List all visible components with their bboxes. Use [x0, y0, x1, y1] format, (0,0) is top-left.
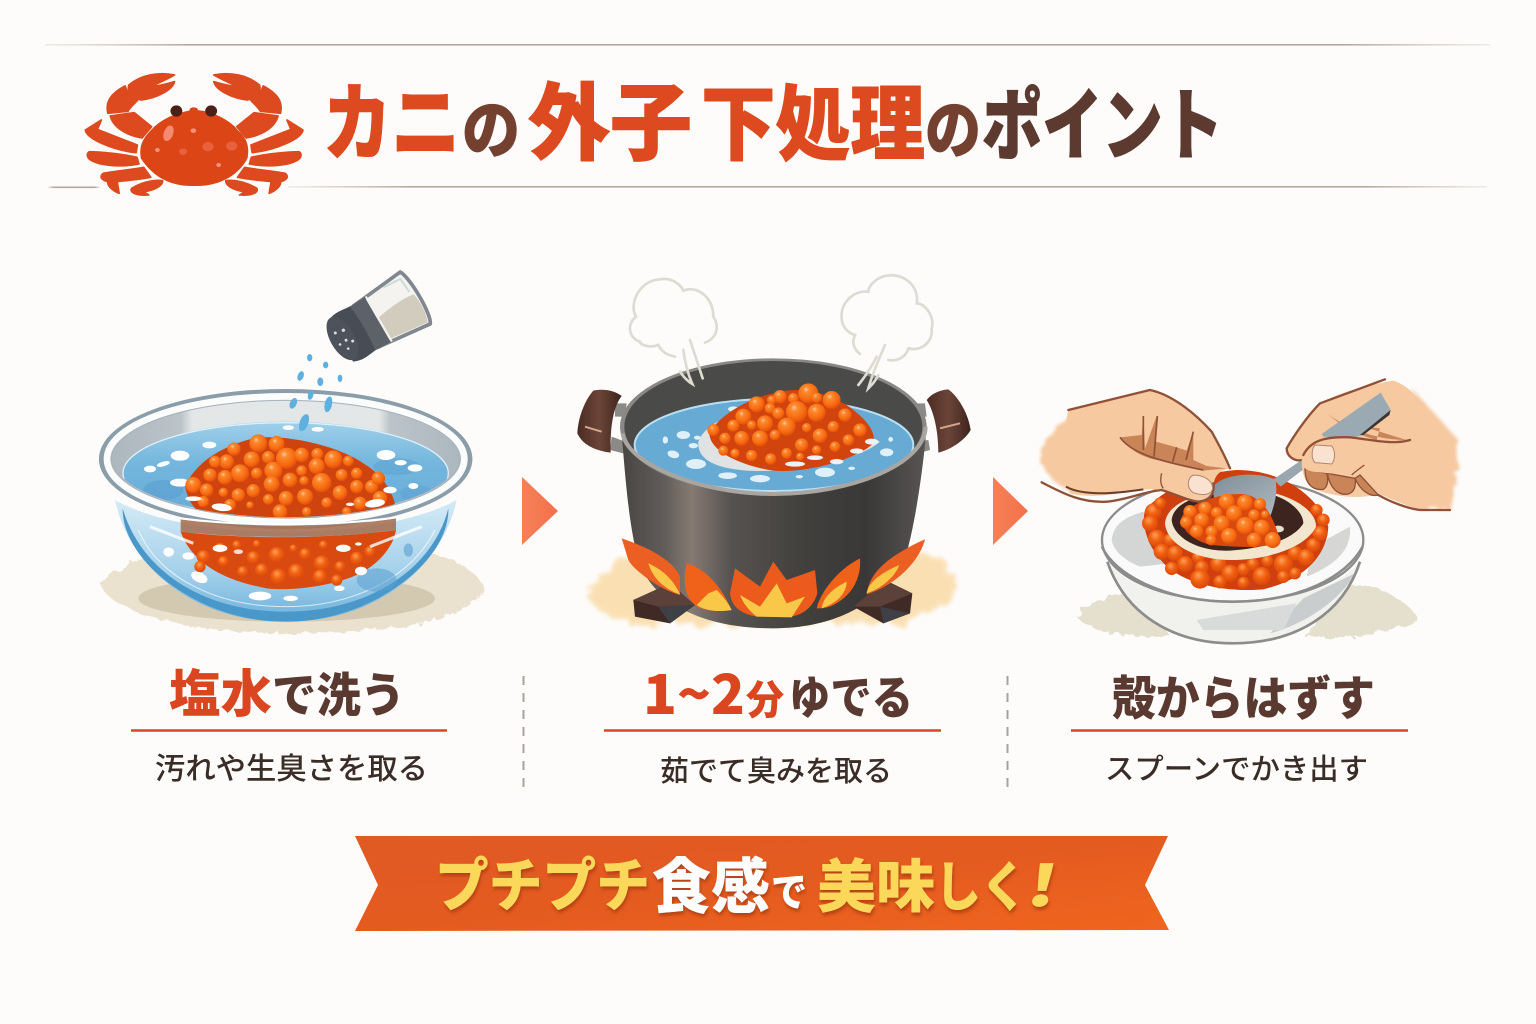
step 3 underline: [1071, 729, 1408, 732]
illustration: hands scooping roe from shell: [1040, 379, 1459, 643]
bottom header rule: [48, 186, 1487, 188]
crab shell with roe: [1142, 470, 1330, 590]
step 2 heading: 分: [746, 668, 784, 726]
illustration: salted water bowl with roe: [99, 270, 483, 633]
banner text: 美味: [817, 840, 935, 924]
step 2 heading: ゆでる: [789, 662, 913, 728]
step 3 caption: スプーンでかき出す: [1105, 746, 1368, 788]
pot handles: [577, 389, 971, 453]
banner text: !: [1021, 842, 1065, 923]
bowl glass body: [115, 500, 457, 622]
divider 1: [522, 676, 524, 790]
burner stands: [633, 580, 912, 623]
serving bowl front: [1102, 547, 1363, 643]
salt droplets: [288, 354, 342, 433]
pot body: [622, 427, 927, 628]
icon: crab: [85, 74, 303, 195]
banner text: しく: [935, 843, 1027, 922]
roe pile through the glass: [150, 527, 422, 601]
pot interior and water: [620, 358, 927, 495]
title: カニ: [323, 57, 460, 178]
roe in pot: [707, 383, 878, 471]
steam clouds: [630, 275, 932, 388]
step 2 caption: 茹でて臭みを取る: [660, 748, 892, 790]
title: 下処理: [701, 58, 925, 177]
spoon handle: [1322, 393, 1391, 438]
title: 外子: [528, 57, 692, 178]
bowl back and water: [99, 400, 472, 508]
step 3 heading: 殻からはずす: [1112, 660, 1375, 729]
step 1 heading: [169, 653, 405, 727]
title: [323, 57, 1223, 178]
step 2 underline: [604, 729, 941, 732]
banner text: 食感: [652, 839, 770, 926]
top header rule: [45, 44, 1490, 46]
step 1 caption: 汚れや生臭さを取る: [155, 744, 428, 788]
salt shaker: [318, 270, 434, 372]
step 1 heading: 塩水: [169, 653, 272, 727]
step 2 heading: 1~2: [643, 651, 745, 730]
title: の: [462, 80, 520, 172]
arrow: step 1 to 2: [522, 477, 558, 545]
serving bowl back: [1102, 478, 1363, 602]
illustration: pot on fire: [577, 275, 971, 628]
banner text: [435, 839, 1065, 926]
table shadow: [1077, 583, 1417, 637]
bowl rim: [101, 391, 470, 537]
step 1 heading: で洗う: [272, 657, 405, 726]
arrow: step 2 to 3: [993, 477, 1028, 545]
spoon neck: [1273, 460, 1306, 487]
right hand: [1287, 379, 1459, 510]
table shadow: [100, 547, 483, 633]
divider 2: [1006, 676, 1008, 790]
spoon bowl: [1213, 475, 1276, 517]
flame glow: [587, 550, 954, 625]
step 1 underline: [131, 729, 447, 732]
roe pile above the rim: [185, 434, 397, 519]
banner text: プチプチ: [435, 839, 650, 923]
banner ribbon: [355, 836, 1169, 931]
roe on the spoon: [1180, 494, 1281, 548]
left hand: [1040, 390, 1230, 502]
banner text: で: [771, 860, 807, 918]
flames: [622, 538, 925, 617]
step 2 heading: [643, 651, 913, 730]
right thumb: [1302, 437, 1410, 475]
title: の: [925, 80, 981, 172]
title: ポイント: [982, 64, 1223, 176]
